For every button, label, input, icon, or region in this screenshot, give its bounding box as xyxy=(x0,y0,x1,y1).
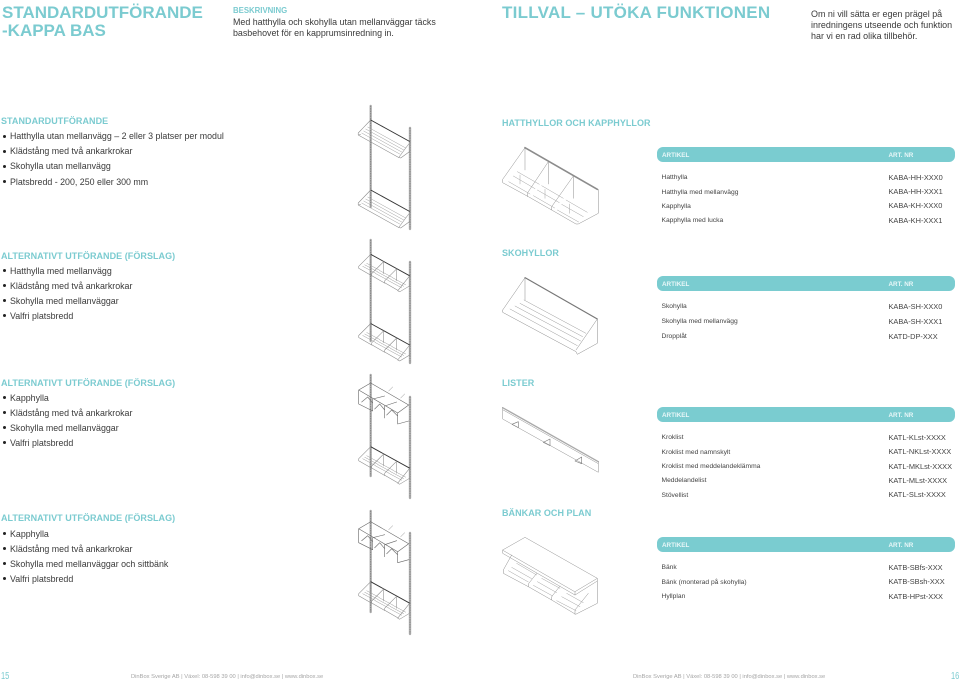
intro text xyxy=(811,9,952,41)
table: hatthyllor: Hatthylla xyxy=(662,174,688,181)
table: lister: KATL-MKLst-XXXX xyxy=(888,462,952,470)
table: lister: ART. NR xyxy=(888,412,913,419)
table: skohyllor: Skohylla xyxy=(662,303,687,310)
heading: alternativt 2: ALTERNATIVT UTFÖRANDE (FÖRSLAG) xyxy=(1,378,175,388)
description block: BESKRIVNING xyxy=(233,6,287,14)
table: hatthyllor: KABA-KH-XXX1 xyxy=(888,216,942,224)
intro text: har vi en rad olika tillbehör. xyxy=(811,31,917,41)
list: alternativ 1: Klädstång med två ankarkrokar xyxy=(10,280,132,290)
heading: alternativt 3: ALTERNATIVT UTFÖRANDE (FÖRSLAG) xyxy=(1,513,175,523)
table: lister: Kroklist med meddelandeklämma xyxy=(662,463,760,470)
table: skohyllor: KATD-DP-XXX xyxy=(888,332,938,340)
table: skohyllor xyxy=(657,276,955,340)
heading: skohyllor: SKOHYLLOR xyxy=(502,248,559,258)
table: lister: Meddelandelist xyxy=(662,477,706,484)
list: alternativ 2: Skohylla med mellanväggar xyxy=(10,422,119,432)
table: hatthyllor: ARTIKEL xyxy=(662,152,689,159)
list: alternativ 1 xyxy=(3,266,132,321)
drawing: bänk xyxy=(503,537,597,614)
heading: standardutförande: STANDARDUTFÖRANDE xyxy=(1,116,108,126)
list: alternativ 2: Kapphylla xyxy=(10,392,49,402)
list: standard: Platsbredd - 200, 250 eller 300 mm xyxy=(10,176,148,186)
drawing: alternativ 1 xyxy=(359,240,410,363)
title: standardutförande kappa bas: STANDARDUTFÖRANDE xyxy=(2,3,203,22)
list: alternativ 2: Klädstång med två ankarkrokar xyxy=(10,408,132,418)
table: hatthyllor: Hatthylla med mellanvägg xyxy=(662,188,738,196)
table: bänkar: ART. NR xyxy=(888,542,913,549)
table: bänkar: ARTIKEL xyxy=(662,542,689,549)
table: hatthyllor: KABA-KH-XXX0 xyxy=(888,201,942,210)
description block: basbehovet för en kapprumsinredning in. xyxy=(233,28,394,38)
list: alternativ 3: Valfri platsbredd xyxy=(10,574,73,584)
table: skohyllor: KABA-SH-XXX1 xyxy=(888,316,942,326)
table: skohyllor: Dropplåt xyxy=(662,333,687,340)
intro text: Om ni vill sätta er egen prägel på xyxy=(811,9,942,19)
drawing: kroklist xyxy=(503,408,598,472)
table: lister: ARTIKEL xyxy=(662,412,689,419)
list: alternativ 3: Klädstång med två ankarkrokar xyxy=(10,544,132,554)
table: hatthyllor: Kapphylla med lucka xyxy=(662,217,723,224)
list: alternativ 1: Skohylla med mellanväggar xyxy=(10,296,119,306)
table: hatthyllor: ART. NR xyxy=(888,152,913,159)
heading: bänkar: BÄNKAR OCH PLAN xyxy=(502,508,591,518)
drawing: alternativ 3 xyxy=(359,511,410,634)
table: skohyllor: ARTIKEL xyxy=(662,281,689,288)
list: alternativ 1: Hatthylla med mellanvägg xyxy=(10,266,112,276)
table: bänkar: Bänk xyxy=(662,564,677,571)
page number 15: 15 xyxy=(1,670,9,682)
table: skohyllor: KABA-SH-XXX0 xyxy=(888,302,942,310)
table: hatthyllor: Kapphylla xyxy=(662,202,691,210)
table: bänkar: Hyllplan xyxy=(662,593,685,600)
table: bänkar xyxy=(657,537,955,600)
table: lister xyxy=(657,407,955,499)
drawing: alternativ 2 xyxy=(359,375,410,498)
table: hatthyllor xyxy=(657,147,955,224)
list: alternativ 2: Valfri platsbredd xyxy=(10,438,73,448)
table: lister: KATL-SLst-XXXX xyxy=(888,490,946,499)
heading: lister: LISTER xyxy=(502,378,534,388)
drawing: standard module xyxy=(358,106,410,229)
table: lister: KATL-MLst-XXXX xyxy=(888,476,947,484)
list: standard: Skohylla utan mellanvägg xyxy=(10,161,111,171)
table: hatthyllor: KABA-HH-XXX1 xyxy=(888,187,943,196)
table: hatthyllor: KABA-HH-XXX0 xyxy=(888,172,943,182)
list: standard: Hatthylla utan mellanvägg – 2 eller 3 platser per modul xyxy=(10,131,224,141)
table: lister: KATL-NKLst-XXXX xyxy=(888,447,951,456)
list: standard: Klädstång med två ankarkrokar xyxy=(10,146,132,156)
table: lister: Stövellist xyxy=(662,492,688,498)
heading: alternativt 1: ALTERNATIVT UTFÖRANDE (FÖRSLAG) xyxy=(1,250,175,260)
drawing: skohylla xyxy=(503,278,597,354)
footer left: DinBox Sverige AB | Växel: 08-598 39 00 | info@dinbox.se | www.dinbox.se xyxy=(131,674,323,680)
list: alternativ 1: Valfri platsbredd xyxy=(10,310,73,320)
list: alternativ 3: Kapphylla xyxy=(10,528,49,538)
table: skohyllor: Skohylla med mellanvägg xyxy=(662,318,738,325)
description block: Med hatthylla och skohylla utan mellanväggar täcks xyxy=(233,17,436,27)
title: standardutförande kappa bas xyxy=(2,3,203,40)
heading: hatthyllor: HATTHYLLOR OCH KAPPHYLLOR xyxy=(502,118,651,128)
list: alternativ 3 xyxy=(3,528,168,584)
table: lister: Kroklist med namnskylt xyxy=(662,448,730,456)
table: lister: KATL-KLst-XXXX xyxy=(888,432,946,442)
table: bänkar: KATB-HPst-XXX xyxy=(888,592,943,600)
intro text: inredningens utseende och funktion xyxy=(811,20,952,30)
table: lister: Kroklist xyxy=(662,434,683,441)
list: alternativ 2 xyxy=(3,392,132,448)
page number 16: 16 xyxy=(951,670,959,682)
drawing: hatthylla xyxy=(503,148,598,224)
footer right: DinBox Sverige AB | Växel: 08-598 39 00 | info@dinbox.se | www.dinbox.se xyxy=(633,674,825,680)
description block xyxy=(233,6,436,38)
title: tillval: TILLVAL – UTÖKA FUNKTIONEN xyxy=(502,3,770,22)
table: bänkar: Bänk (monterad på skohylla) xyxy=(662,578,747,586)
table: bänkar: KATB-SBfs-XXX xyxy=(888,562,943,572)
list: alternativ 3: Skohylla med mellanväggar och sittbänk xyxy=(10,558,168,568)
table: bänkar: KATB-SBsh-XXX xyxy=(888,577,945,586)
table: skohyllor: ART. NR xyxy=(888,281,913,288)
title: standardutförande kappa bas: -KAPPA BAS xyxy=(2,21,106,40)
list: standard xyxy=(3,131,224,186)
